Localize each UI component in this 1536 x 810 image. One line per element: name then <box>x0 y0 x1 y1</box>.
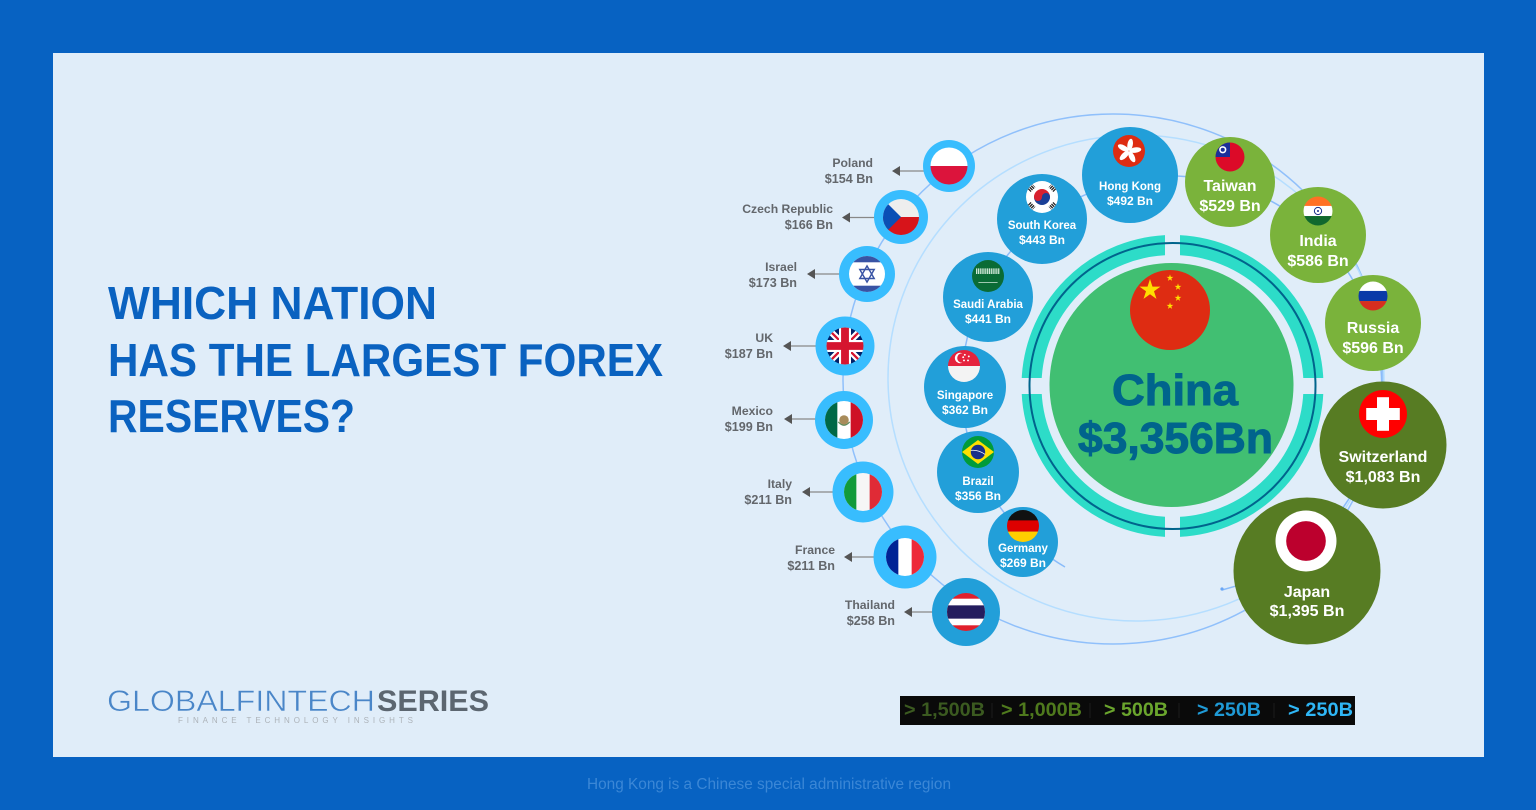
bubble: Switzerland: $1,083 Bn <box>1346 469 1420 486</box>
bubble: Germany: $269 Bn <box>1000 556 1046 570</box>
flag: Mexico <box>825 401 863 439</box>
flag: Germany <box>1007 510 1039 542</box>
flag: UK <box>826 328 864 364</box>
logo: Global Fintech Series: SERIES <box>377 685 489 718</box>
flag: China <box>1130 270 1210 350</box>
bubble: France: France <box>795 543 835 557</box>
legend: > 250B <box>1197 700 1261 721</box>
title <box>108 277 663 442</box>
bubble: France: $211 Bn <box>787 559 835 573</box>
bubble: Poland <box>825 140 975 192</box>
flag: Israel <box>849 256 885 292</box>
title: WHICH NATION <box>108 277 437 329</box>
arrow: Italy <box>802 487 834 497</box>
bubble: Czech Republic: $166 Bn <box>785 218 833 232</box>
China label: $3,356Bn <box>1078 414 1273 463</box>
arrow: Thailand <box>904 607 933 617</box>
flag: France <box>886 538 924 576</box>
bubble: Mexico <box>725 391 873 449</box>
bubble: Israel: Israel <box>765 260 797 274</box>
legend: > 1,500B <box>904 700 985 721</box>
bubble: Switzerland <box>1320 382 1446 508</box>
bubble: Israel: $173 Bn <box>749 276 797 290</box>
bubble: Mexico: Mexico <box>732 404 773 418</box>
flag: Czech Republic <box>883 199 919 235</box>
bubble: UK: UK <box>755 331 773 345</box>
bubble: Germany: Germany <box>998 543 1049 555</box>
China centre: rings and bubble <box>1019 232 1326 540</box>
flag: Brazil <box>962 436 994 468</box>
bubble: Brazil <box>937 431 1019 513</box>
bubble: Singapore: Singapore <box>937 390 993 402</box>
flag: Singapore <box>948 350 980 382</box>
bubble: Thailand: $258 Bn <box>847 614 895 628</box>
flag: Switzerland <box>1359 390 1407 438</box>
bubble: Saudi Arabia: $441 Bn <box>965 312 1011 326</box>
bubble: South Korea <box>997 174 1087 264</box>
bubble: Poland: $154 Bn <box>825 172 873 186</box>
arrow: France <box>844 552 875 562</box>
bubble: India: India <box>1299 233 1337 250</box>
bubble: Japan: Japan <box>1284 584 1330 601</box>
bubble: South Korea: South Korea <box>1008 220 1077 232</box>
flag: Saudi Arabia <box>972 260 1004 292</box>
bubble: Mexico: $199 Bn <box>725 420 773 434</box>
bubble: Japan: $1,395 Bn <box>1270 603 1344 620</box>
flag: India <box>1304 196 1332 226</box>
bubble: South Korea: $443 Bn <box>1019 233 1065 247</box>
China label <box>1078 366 1273 463</box>
bubble: Brazil: $356 Bn <box>955 489 1001 503</box>
bubble: Germany <box>988 507 1058 577</box>
bubble: Switzerland: Switzerland <box>1339 449 1427 466</box>
bubble: Russia: Russia <box>1347 320 1399 337</box>
bubble: Poland: Poland <box>832 156 873 170</box>
bubble: Taiwan: Taiwan <box>1203 178 1257 195</box>
arrow: Mexico <box>784 414 816 424</box>
flag: Taiwan <box>1216 142 1244 172</box>
bubble: Brazil: Brazil <box>962 476 994 488</box>
footnote: Hong Kong is a Chinese special administrative region <box>587 776 951 793</box>
legend: > 1,000B <box>1001 700 1082 721</box>
arrow: Israel <box>807 269 841 279</box>
bubble: UK <box>725 316 874 376</box>
bubble: Thailand <box>845 578 1000 646</box>
China label: China <box>1112 366 1239 415</box>
flag: Poland <box>930 148 968 184</box>
bubble: Czech Republic: Czech Republic <box>742 202 833 216</box>
flag: South Korea <box>1026 181 1058 213</box>
flag: Japan <box>1276 510 1336 572</box>
bubble: Saudi Arabia <box>943 252 1033 342</box>
title: HAS THE LARGEST FOREX <box>108 334 663 386</box>
bubble: Italy: $211 Bn <box>744 493 792 507</box>
bubble: Russia <box>1325 275 1421 371</box>
bubble: Singapore: $362 Bn <box>942 403 988 417</box>
bubble: Italy: Italy <box>768 477 792 491</box>
bubble: France <box>787 526 936 588</box>
bubble: Hong Kong: Hong Kong <box>1099 181 1161 193</box>
bubble: Singapore <box>924 346 1006 428</box>
bubble: Czech Republic <box>742 190 928 244</box>
orbit lines <box>843 114 1384 644</box>
bubble: Thailand: Thailand <box>845 598 895 612</box>
legend: > 250B <box>1288 700 1353 721</box>
legend: > 500B <box>1104 700 1168 721</box>
logo: Global Fintech Series: FINANCE TECHNOLOGY INSIGHTS <box>178 716 413 725</box>
arrow: Czech Republic <box>842 212 876 222</box>
bubble: Italy <box>744 462 894 522</box>
logo: Global Fintech Series <box>107 685 489 725</box>
bubble: Israel <box>749 246 895 302</box>
bubble: Taiwan <box>1185 137 1275 227</box>
arrow: Poland <box>892 166 925 176</box>
flag: Thailand <box>947 593 985 631</box>
flag: Italy <box>844 473 882 511</box>
flag: Hong Kong <box>1113 135 1145 167</box>
arrow: UK <box>783 341 817 351</box>
bubble: Hong Kong: $492 Bn <box>1107 194 1153 208</box>
bubble: UK: $187 Bn <box>725 347 773 361</box>
legend <box>900 696 1355 725</box>
bubble: Taiwan: $529 Bn <box>1199 198 1261 215</box>
bubble: Saudi Arabia: Saudi Arabia <box>953 299 1024 311</box>
bubble: Russia: $596 Bn <box>1342 340 1404 357</box>
bubble: Hong Kong <box>1082 127 1178 223</box>
logo: Global Fintech Series: GLOBALFINTECH <box>107 685 375 718</box>
bubble: India <box>1270 187 1366 283</box>
title: RESERVES? <box>108 390 355 442</box>
flag: Russia <box>1358 282 1388 310</box>
bubble: Japan <box>1234 498 1380 644</box>
bubble: India: $586 Bn <box>1287 253 1349 270</box>
